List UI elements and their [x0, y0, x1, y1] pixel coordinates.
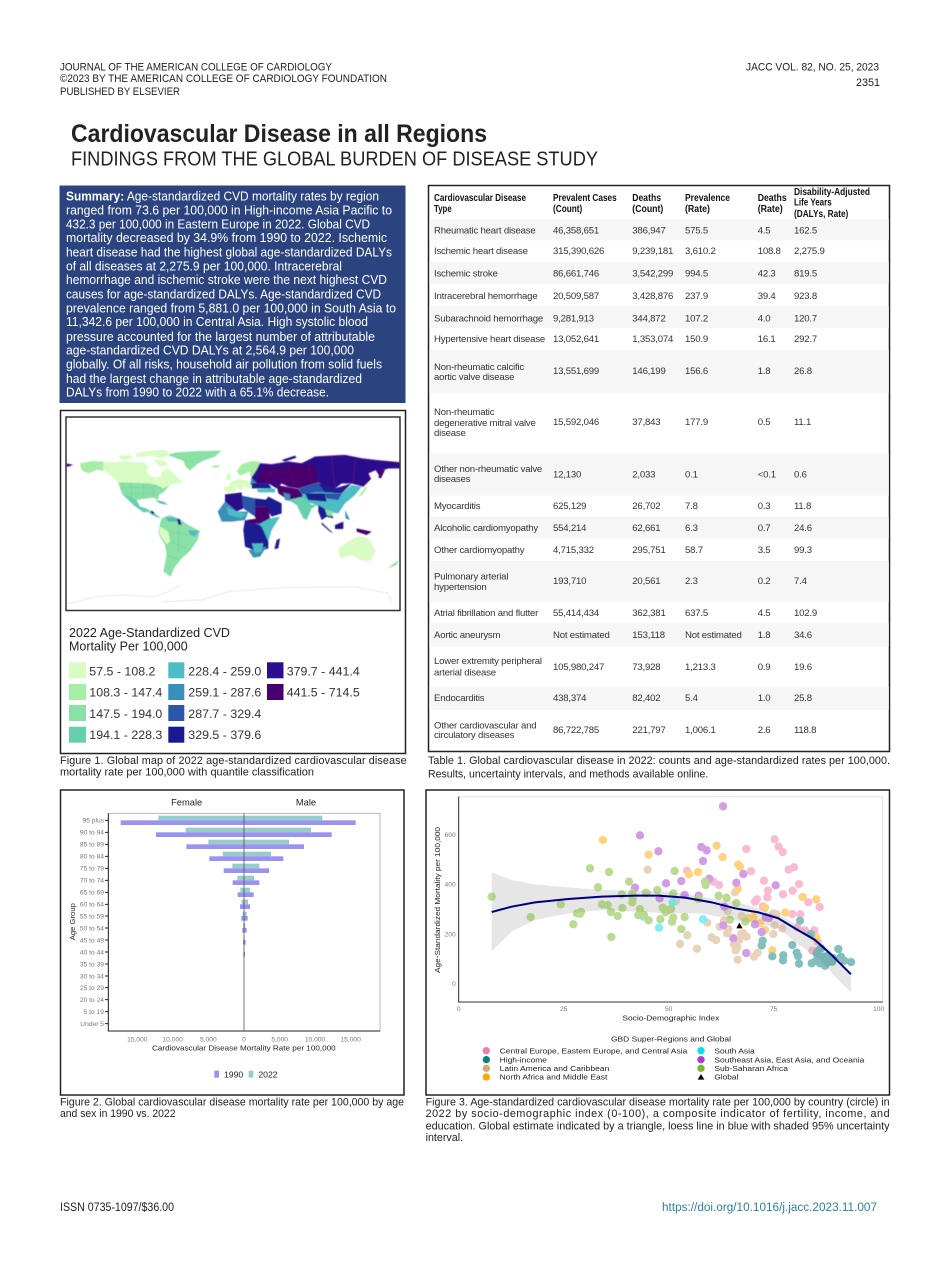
scatter legend	[483, 1034, 865, 1082]
row: alcoholic cardiomyopathy: 0.7	[758, 523, 770, 534]
panel: summary: hemorrhage and ischemic stroke were the next highest CVD	[66, 273, 387, 287]
row: pulmonary arterial hypertension: Pulmonary arterial	[434, 572, 508, 582]
row: atrial fibrillation and flutter: 4.5	[758, 608, 770, 619]
global triangle	[736, 923, 743, 928]
row: ischemic stroke: 42.3	[758, 268, 776, 280]
age group axis: 75 to 79	[80, 866, 104, 873]
table 1 caption: Table 1. Global cardiovascular disease in 2022: counts and age-standardized rates per 100,000.	[428, 755, 890, 767]
row: alcoholic cardiomyopathy	[434, 523, 812, 534]
plot area	[459, 797, 883, 1002]
row: ischemic stroke	[434, 268, 817, 280]
row: ischemic stroke: 819.5	[794, 268, 817, 280]
row: ischemic heart disease: 108.8	[758, 246, 781, 257]
panel: summary: pressure accounted for the largest number of attributable	[66, 330, 375, 344]
table header: Type	[434, 204, 452, 215]
row: rheumatic heart disease: 46,358,651	[553, 226, 599, 236]
row: endocarditis	[434, 693, 812, 704]
row: non-rheumatic calcific aortic valve disease: 1.8	[758, 366, 770, 377]
panel: summary: heart disease had the highest global age-standardized DALYs	[66, 245, 392, 259]
figure 3 caption: education. Global estimate indicated by a triangle, loess line in blue with shaded 95% uncertainty	[426, 1120, 890, 1132]
scatter legend: GBD Super-Regions and Global	[611, 1034, 731, 1043]
panel: summary: 432.3 per 100,000 in Eastern Europe in 2022. Global CVD	[66, 218, 370, 232]
panel: summary: of all diseases at 2,275.9 per 100,000. Intracerebral	[66, 259, 342, 273]
row: rheumatic heart disease: 575.5	[685, 226, 708, 236]
world map	[66, 417, 400, 610]
scatter legend: High-income	[500, 1055, 547, 1064]
panel: summary: age-standardized CVD DALYs at 2,564.9 per 100,000	[66, 343, 354, 357]
scatter legend: North Africa and Middle East	[500, 1073, 607, 1082]
row: intracerebral hemorrhage: 923.8	[794, 291, 817, 302]
row: other cardiomyopathy	[434, 545, 812, 556]
scatter legend: Global	[714, 1073, 739, 1082]
row: other cardiovascular and circulatory diseases: 221,797	[632, 725, 666, 736]
y axis: 600	[445, 832, 456, 839]
row: other cardiovascular and circulatory diseases: Other cardiovascular and	[434, 720, 536, 732]
mortality rate axis: 0	[242, 1036, 246, 1043]
x axis: 25	[560, 1006, 568, 1013]
plot area and bars	[108, 813, 380, 1031]
legend: 1990 vs 2022: 1990	[224, 1069, 243, 1079]
row: non-rheumatic calcific aortic valve disease: 13,551,699	[553, 366, 599, 377]
row: intracerebral hemorrhage: 20,509,587	[553, 291, 599, 302]
footer DOI: https://doi.org/10.1016/j.jacc.2023.11.007	[662, 1202, 877, 1214]
panel: summary: globally. Of all risks, household air pollution from solid fuels	[66, 357, 382, 371]
row: lower extremity peripheral arterial disease: arterial disease	[434, 668, 496, 678]
row: aortic aneurysm: 34.6	[794, 630, 812, 641]
row: non-rheumatic degenerative mitral valve disease: degenerative mitral valve	[434, 418, 536, 429]
scatter legend: Southeast Asia, East Asia, and Oceania	[714, 1055, 865, 1064]
row: alcoholic cardiomyopathy: Alcoholic cardiomyopathy	[434, 523, 538, 534]
table header: Prevalent Cases	[553, 193, 617, 204]
scatter legend: Latin America and Caribbean	[500, 1064, 609, 1073]
row: myocarditis: 11.8	[794, 501, 811, 512]
row: alcoholic cardiomyopathy: 24.6	[794, 523, 812, 534]
panel: summary: ranged from 73.6 per 100,000 in High-income Asia Pacific to	[66, 203, 392, 217]
x axis	[457, 1006, 885, 1022]
panel: figure 3 scatter plot	[426, 790, 890, 1095]
row: endocarditis: Endocarditis	[434, 693, 485, 704]
row: other non-rheumatic valve diseases: 0.6	[794, 470, 807, 480]
panel: summary: mortality decreased by 34.9% from 1990 to 2022. Ischemic	[66, 231, 387, 245]
row: endocarditis: 438,374	[553, 693, 587, 704]
row: endocarditis: 82,402	[632, 693, 660, 704]
age group axis: 95 plus	[83, 818, 105, 825]
row: ischemic stroke: 86,661,746	[553, 268, 599, 280]
figure 1 caption: Figure 1. Global map of 2022 age-standardized cardiovascular disease	[60, 755, 407, 767]
map legend: 441.5 - 714.5	[287, 686, 360, 700]
table header: Cardiovascular Disease	[434, 193, 526, 204]
row: alcoholic cardiomyopathy: 554,214	[553, 523, 587, 534]
row: ischemic heart disease: 2,275.9	[794, 246, 825, 257]
scatter legend: South Asia	[714, 1046, 756, 1055]
row: other cardiomyopathy: 3.5	[758, 545, 770, 556]
panel: table 1	[428, 186, 890, 752]
row: ischemic heart disease	[434, 246, 825, 257]
mortality rate axis: 10,000	[162, 1036, 183, 1043]
table header: (Count)	[553, 204, 582, 215]
table header: Deaths	[758, 193, 787, 204]
panel: summary: had the largest change in attributable age-standardized	[66, 372, 362, 386]
loess line	[492, 896, 851, 974]
scatter legend: Central Europe, Eastern Europe, and Central Asia	[500, 1046, 688, 1055]
table 1 caption	[428, 755, 890, 780]
row: rheumatic heart disease: 4.5	[758, 226, 770, 236]
row: ischemic stroke: Ischemic stroke	[434, 268, 498, 280]
row: other cardiovascular and circulatory diseases: 2.6	[758, 725, 770, 736]
row: lower extremity peripheral arterial disease: 1,213.3	[685, 662, 716, 673]
row: intracerebral hemorrhage: 3,428,876	[632, 291, 673, 302]
y axis: 200	[445, 931, 456, 938]
map legend: 379.7 - 441.4	[287, 664, 360, 678]
panel: figure 2 population pyramid	[60, 790, 404, 1095]
legend: 1990 vs 2022: 2022	[258, 1069, 278, 1079]
row: lower extremity peripheral arterial disease: 73,928	[632, 662, 660, 673]
row: non-rheumatic degenerative mitral valve disease	[434, 407, 811, 439]
map legend: 259.1 - 287.6	[188, 686, 261, 700]
panel: summary: DALYs from 1990 to 2022 with a 65.1% decrease.	[66, 385, 329, 399]
panel: figure 1 map and legend	[60, 410, 406, 754]
figure 1 caption: mortality rate per 100,000 with quantile classification	[60, 766, 314, 778]
row: alcoholic cardiomyopathy: 62,661	[632, 523, 660, 534]
row: other non-rheumatic valve diseases: 0.1	[685, 470, 698, 480]
age group axis	[68, 818, 108, 1028]
age group axis: 50 to 54	[80, 925, 104, 932]
map legend title: Mortality Per 100,000	[69, 638, 188, 654]
row: intracerebral hemorrhage	[434, 291, 817, 302]
row: myocarditis: Myocarditis	[434, 501, 481, 512]
row: aortic aneurysm: Aortic aneurysm	[434, 630, 501, 641]
row: other cardiovascular and circulatory diseases: 1,006.1	[685, 725, 716, 736]
row: other non-rheumatic valve diseases: Other non-rheumatic valve	[434, 464, 542, 475]
row: aortic aneurysm	[434, 630, 812, 641]
y axis: 0	[452, 981, 456, 988]
panel: summary: 11,342.6 per 100,000 in Central Asia. High systolic blood	[66, 315, 368, 329]
row: hypertensive heart disease: 16.1	[758, 334, 776, 345]
row: hypertensive heart disease: Hypertensive heart disease	[434, 334, 545, 345]
row: endocarditis: 1.0	[758, 693, 770, 704]
row: aortic aneurysm: Not estimated	[553, 630, 610, 641]
row: intracerebral hemorrhage: 39.4	[758, 291, 776, 302]
row: other cardiomyopathy: 99.3	[794, 545, 812, 556]
age group axis: 85 to 89	[80, 842, 104, 849]
table header: (DALYs, Rate)	[794, 209, 848, 220]
panel: summary: Summary: Age-standardized CVD mortality rates by region	[66, 189, 379, 203]
figure 1 caption	[60, 755, 407, 778]
row: non-rheumatic degenerative mitral valve disease: 177.9	[685, 417, 708, 428]
row: non-rheumatic calcific aortic valve disease: aortic valve disease	[434, 372, 514, 383]
table header: (Count)	[632, 204, 663, 215]
row: myocarditis	[434, 501, 811, 512]
table header	[434, 187, 870, 220]
row: myocarditis: 7.8	[685, 501, 698, 512]
map legend: 194.1 - 228.3	[89, 728, 162, 742]
panel: summary: prevalence ranged from 5,881.0 per 100,000 in South Asia to	[66, 302, 396, 316]
row: lower extremity peripheral arterial disease: 19.6	[794, 662, 812, 673]
row: hypertensive heart disease: 150.9	[685, 334, 708, 345]
row: pulmonary arterial hypertension: 0.2	[758, 576, 770, 587]
row: myocarditis: 26,702	[632, 501, 660, 512]
row: hypertensive heart disease: 13,052,641	[553, 334, 599, 345]
row: non-rheumatic degenerative mitral valve disease: Non-rheumatic	[434, 407, 495, 418]
table header: (Rate)	[685, 204, 710, 215]
row: myocarditis: 0.3	[758, 501, 770, 512]
row: subarachnoid hemorrhage	[434, 314, 817, 324]
age group axis: 90 to 94	[80, 830, 104, 837]
row: intracerebral hemorrhage: 237.9	[685, 291, 708, 302]
row: hypertensive heart disease: 292.7	[794, 334, 817, 345]
subtitle: FINDINGS FROM THE GLOBAL BURDEN OF DISEASE STUDY	[71, 148, 598, 170]
figure 3 caption: interval.	[426, 1132, 463, 1144]
row: non-rheumatic degenerative mitral valve disease: 11.1	[794, 417, 811, 428]
row: subarachnoid hemorrhage: Subarachnoid hemorrhage	[434, 314, 543, 324]
row: pulmonary arterial hypertension: 2.3	[685, 576, 698, 587]
row: lower extremity peripheral arterial disease: 0.9	[758, 662, 770, 673]
sex labels	[171, 798, 316, 808]
map legend: 329.5 - 379.6	[188, 728, 261, 742]
table header: Deaths	[632, 193, 661, 204]
row: other cardiomyopathy: Other cardiomyopathy	[434, 545, 525, 556]
figure 3 caption: 2022 by socio-demographic index (0-100), a composite indicator of fertility, income, and	[426, 1108, 890, 1120]
x axis: 50	[665, 1006, 673, 1013]
row: other cardiovascular and circulatory diseases: 86,722,785	[553, 725, 599, 736]
row: atrial fibrillation and flutter: 637.5	[685, 608, 708, 619]
row: subarachnoid hemorrhage: 107.2	[685, 314, 708, 324]
row: ischemic heart disease: 9,239,181	[632, 246, 673, 257]
row: other cardiomyopathy: 295,751	[632, 545, 666, 556]
figure 3 caption: Figure 3. Age-standardized cardiovascular disease mortality rate per 100,000 by country (circle) in	[426, 1096, 890, 1108]
row: non-rheumatic calcific aortic valve disease: 156.6	[685, 366, 708, 377]
sex labels: Female	[171, 798, 202, 808]
mortality rate axis: 15,000	[340, 1036, 361, 1043]
row: atrial fibrillation and flutter: 55,414,434	[553, 608, 600, 619]
row: aortic aneurysm: 153,118	[632, 630, 665, 641]
table 1 caption: Results, uncertainty intervals, and methods available online.	[428, 768, 708, 780]
row: atrial fibrillation and flutter: 102.9	[794, 608, 817, 619]
row: pulmonary arterial hypertension: 193,710	[553, 576, 586, 587]
row: subarachnoid hemorrhage: 4.0	[758, 314, 770, 324]
row: hypertensive heart disease	[434, 334, 817, 345]
row: rheumatic heart disease: Rheumatic heart disease	[434, 226, 536, 236]
row: subarachnoid hemorrhage: 344,872	[632, 314, 666, 324]
row: hypertensive heart disease: 1,353,074	[632, 334, 674, 345]
figure 2 caption	[60, 1096, 404, 1120]
mortality rate axis: 5,000	[271, 1036, 288, 1043]
mortality rate axis: 10,000	[305, 1036, 325, 1043]
age group axis: 65 to 69	[80, 890, 104, 897]
legend: 1990 vs 2022	[214, 1069, 278, 1079]
journal header: PUBLISHED BY ELSEVIER	[60, 86, 180, 98]
row: other cardiovascular and circulatory diseases: circulatory diseases	[434, 730, 515, 741]
row: atrial fibrillation and flutter: Atrial fibrillation and flutter	[434, 608, 539, 619]
row: pulmonary arterial hypertension: 20,561	[632, 576, 660, 587]
row: pulmonary arterial hypertension: hypertension	[434, 582, 487, 593]
age group axis: 35 to 39	[80, 961, 104, 968]
age group axis: 70 to 74	[80, 878, 104, 885]
figure 2 caption: Figure 2. Global cardiovascular disease mortality rate per 100,000 by age	[60, 1096, 404, 1108]
map legend title: 2022 Age-Standardized CVD	[69, 625, 230, 640]
mortality rate axis: 5,000	[200, 1036, 217, 1043]
mortality rate axis	[127, 1036, 361, 1053]
y axis: Age-Standardized Mortality per 100,000	[433, 827, 442, 973]
row: non-rheumatic calcific aortic valve disease: 146,199	[632, 366, 666, 377]
row: other cardiovascular and circulatory diseases	[434, 720, 816, 741]
x axis: 0	[457, 1006, 461, 1013]
row: non-rheumatic degenerative mitral valve disease: 37,843	[632, 417, 660, 428]
row: other non-rheumatic valve diseases	[434, 464, 807, 485]
panel: summary: causes for age-standardized DALYs. Age-standardized CVD	[66, 288, 381, 302]
panel: summary	[60, 186, 406, 403]
age group axis: 80 to 84	[80, 854, 104, 861]
row: other cardiomyopathy: 58.7	[685, 545, 703, 556]
age group axis: 45 to 49	[80, 937, 104, 944]
row: alcoholic cardiomyopathy: 6.3	[685, 523, 698, 534]
row: atrial fibrillation and flutter	[434, 608, 817, 619]
table header: Prevalence	[685, 193, 730, 204]
volume and page number: 2351	[856, 77, 880, 89]
map legend: 147.5 - 194.0	[89, 707, 162, 721]
row: intracerebral hemorrhage: Intracerebral hemorrhage	[434, 291, 537, 302]
y axis: 400	[445, 882, 456, 889]
age group axis: 30 to 34	[80, 973, 104, 980]
age group axis: 20 to 24	[80, 997, 104, 1004]
row: lower extremity peripheral arterial disease: Lower extremity peripheral	[434, 656, 542, 667]
row: non-rheumatic calcific aortic valve disease: 26.8	[794, 366, 812, 377]
volume and page number	[746, 62, 880, 89]
row: endocarditis: 25.8	[794, 693, 812, 704]
row: lower extremity peripheral arterial disease	[434, 656, 812, 678]
map legend: 228.4 - 259.0	[188, 664, 261, 678]
row: other cardiovascular and circulatory diseases: 118.8	[794, 725, 816, 736]
row: ischemic stroke: 3,542,299	[632, 268, 673, 280]
journal header	[60, 62, 387, 98]
row: non-rheumatic calcific aortic valve disease	[434, 362, 812, 383]
row: ischemic stroke: 994.5	[685, 268, 708, 280]
row: non-rheumatic degenerative mitral valve disease: disease	[434, 428, 466, 439]
x axis: Socio-Demographic Index	[622, 1013, 720, 1022]
row: other non-rheumatic valve diseases: diseases	[434, 474, 471, 485]
age group axis: Under 5	[80, 1021, 104, 1028]
row: non-rheumatic degenerative mitral valve disease: 0.5	[758, 417, 770, 428]
journal header: JOURNAL OF THE AMERICAN COLLEGE OF CARDIOLOGY	[60, 62, 332, 74]
map legend title	[69, 625, 230, 654]
row: endocarditis: 5.4	[685, 693, 699, 704]
row: non-rheumatic degenerative mitral valve disease: 15,592,046	[553, 417, 599, 428]
age group axis: 40 to 44	[80, 949, 104, 956]
table header: (Rate)	[758, 204, 783, 215]
mortality rate axis: Cardiovascular Disease Mortality Rate per 100,000	[152, 1044, 336, 1053]
row: ischemic heart disease: Ischemic heart disease	[434, 246, 528, 257]
row: pulmonary arterial hypertension	[434, 572, 808, 593]
volume and page number: JACC VOL. 82, NO. 25, 2023	[746, 62, 879, 74]
figure 3 caption	[426, 1096, 890, 1144]
row: other non-rheumatic valve diseases: <0.1	[758, 470, 776, 480]
journal header: ©2023 BY THE AMERICAN COLLEGE OF CARDIOLOGY FOUNDATION	[60, 73, 387, 85]
map legend	[69, 662, 360, 743]
age group axis: 60 to 64	[80, 902, 104, 909]
row: atrial fibrillation and flutter: 362,381	[632, 608, 666, 619]
row: aortic aneurysm: 1.8	[758, 630, 770, 641]
mortality rate axis: 15,000	[127, 1036, 148, 1043]
footer ISSN: ISSN 0735-1097/$36.00	[60, 1202, 174, 1214]
x axis: 75	[770, 1006, 778, 1013]
row: ischemic heart disease: 3,610.2	[685, 246, 716, 257]
row: lower extremity peripheral arterial disease: 105,980,247	[553, 662, 604, 673]
scatter legend: Sub-Saharan Africa	[714, 1064, 789, 1073]
sex labels: Male	[296, 798, 316, 808]
row: subarachnoid hemorrhage: 120.7	[794, 314, 817, 324]
map legend: 287.7 - 329.4	[188, 707, 261, 721]
figure 2 caption: and sex in 1990 vs. 2022	[60, 1108, 176, 1120]
row: rheumatic heart disease: 386,947	[632, 226, 666, 236]
y axis	[433, 827, 456, 988]
age group axis: 5 to 19	[84, 1009, 104, 1016]
row: aortic aneurysm: Not estimated	[685, 630, 742, 641]
age group axis: 55 to 59	[80, 913, 104, 920]
table header: Disability-Adjusted	[794, 187, 870, 198]
uncertainty band	[492, 872, 851, 992]
row: subarachnoid hemorrhage: 9,281,913	[553, 314, 594, 324]
row: rheumatic heart disease	[434, 226, 817, 236]
row: other cardiomyopathy: 4,715,332	[553, 545, 594, 556]
row: pulmonary arterial hypertension: 7.4	[794, 576, 808, 587]
row: other non-rheumatic valve diseases: 2,033	[632, 470, 655, 480]
row: other non-rheumatic valve diseases: 12,130	[553, 470, 581, 480]
table header: Life Years	[794, 198, 832, 208]
row: rheumatic heart disease: 162.5	[794, 226, 817, 236]
row: ischemic heart disease: 315,390,626	[553, 246, 604, 257]
map legend: 108.3 - 147.4	[89, 686, 162, 700]
country points	[487, 802, 855, 970]
age group axis: Age Group	[68, 903, 77, 940]
row: myocarditis: 625,129	[553, 501, 586, 512]
age group axis: 25 to 29	[80, 985, 104, 992]
row: non-rheumatic calcific aortic valve disease: Non-rheumatic calcific	[434, 362, 524, 373]
map legend: 57.5 - 108.2	[89, 664, 156, 678]
title: Cardiovascular Disease in all Regions	[71, 120, 487, 148]
x axis: 100	[873, 1006, 885, 1013]
